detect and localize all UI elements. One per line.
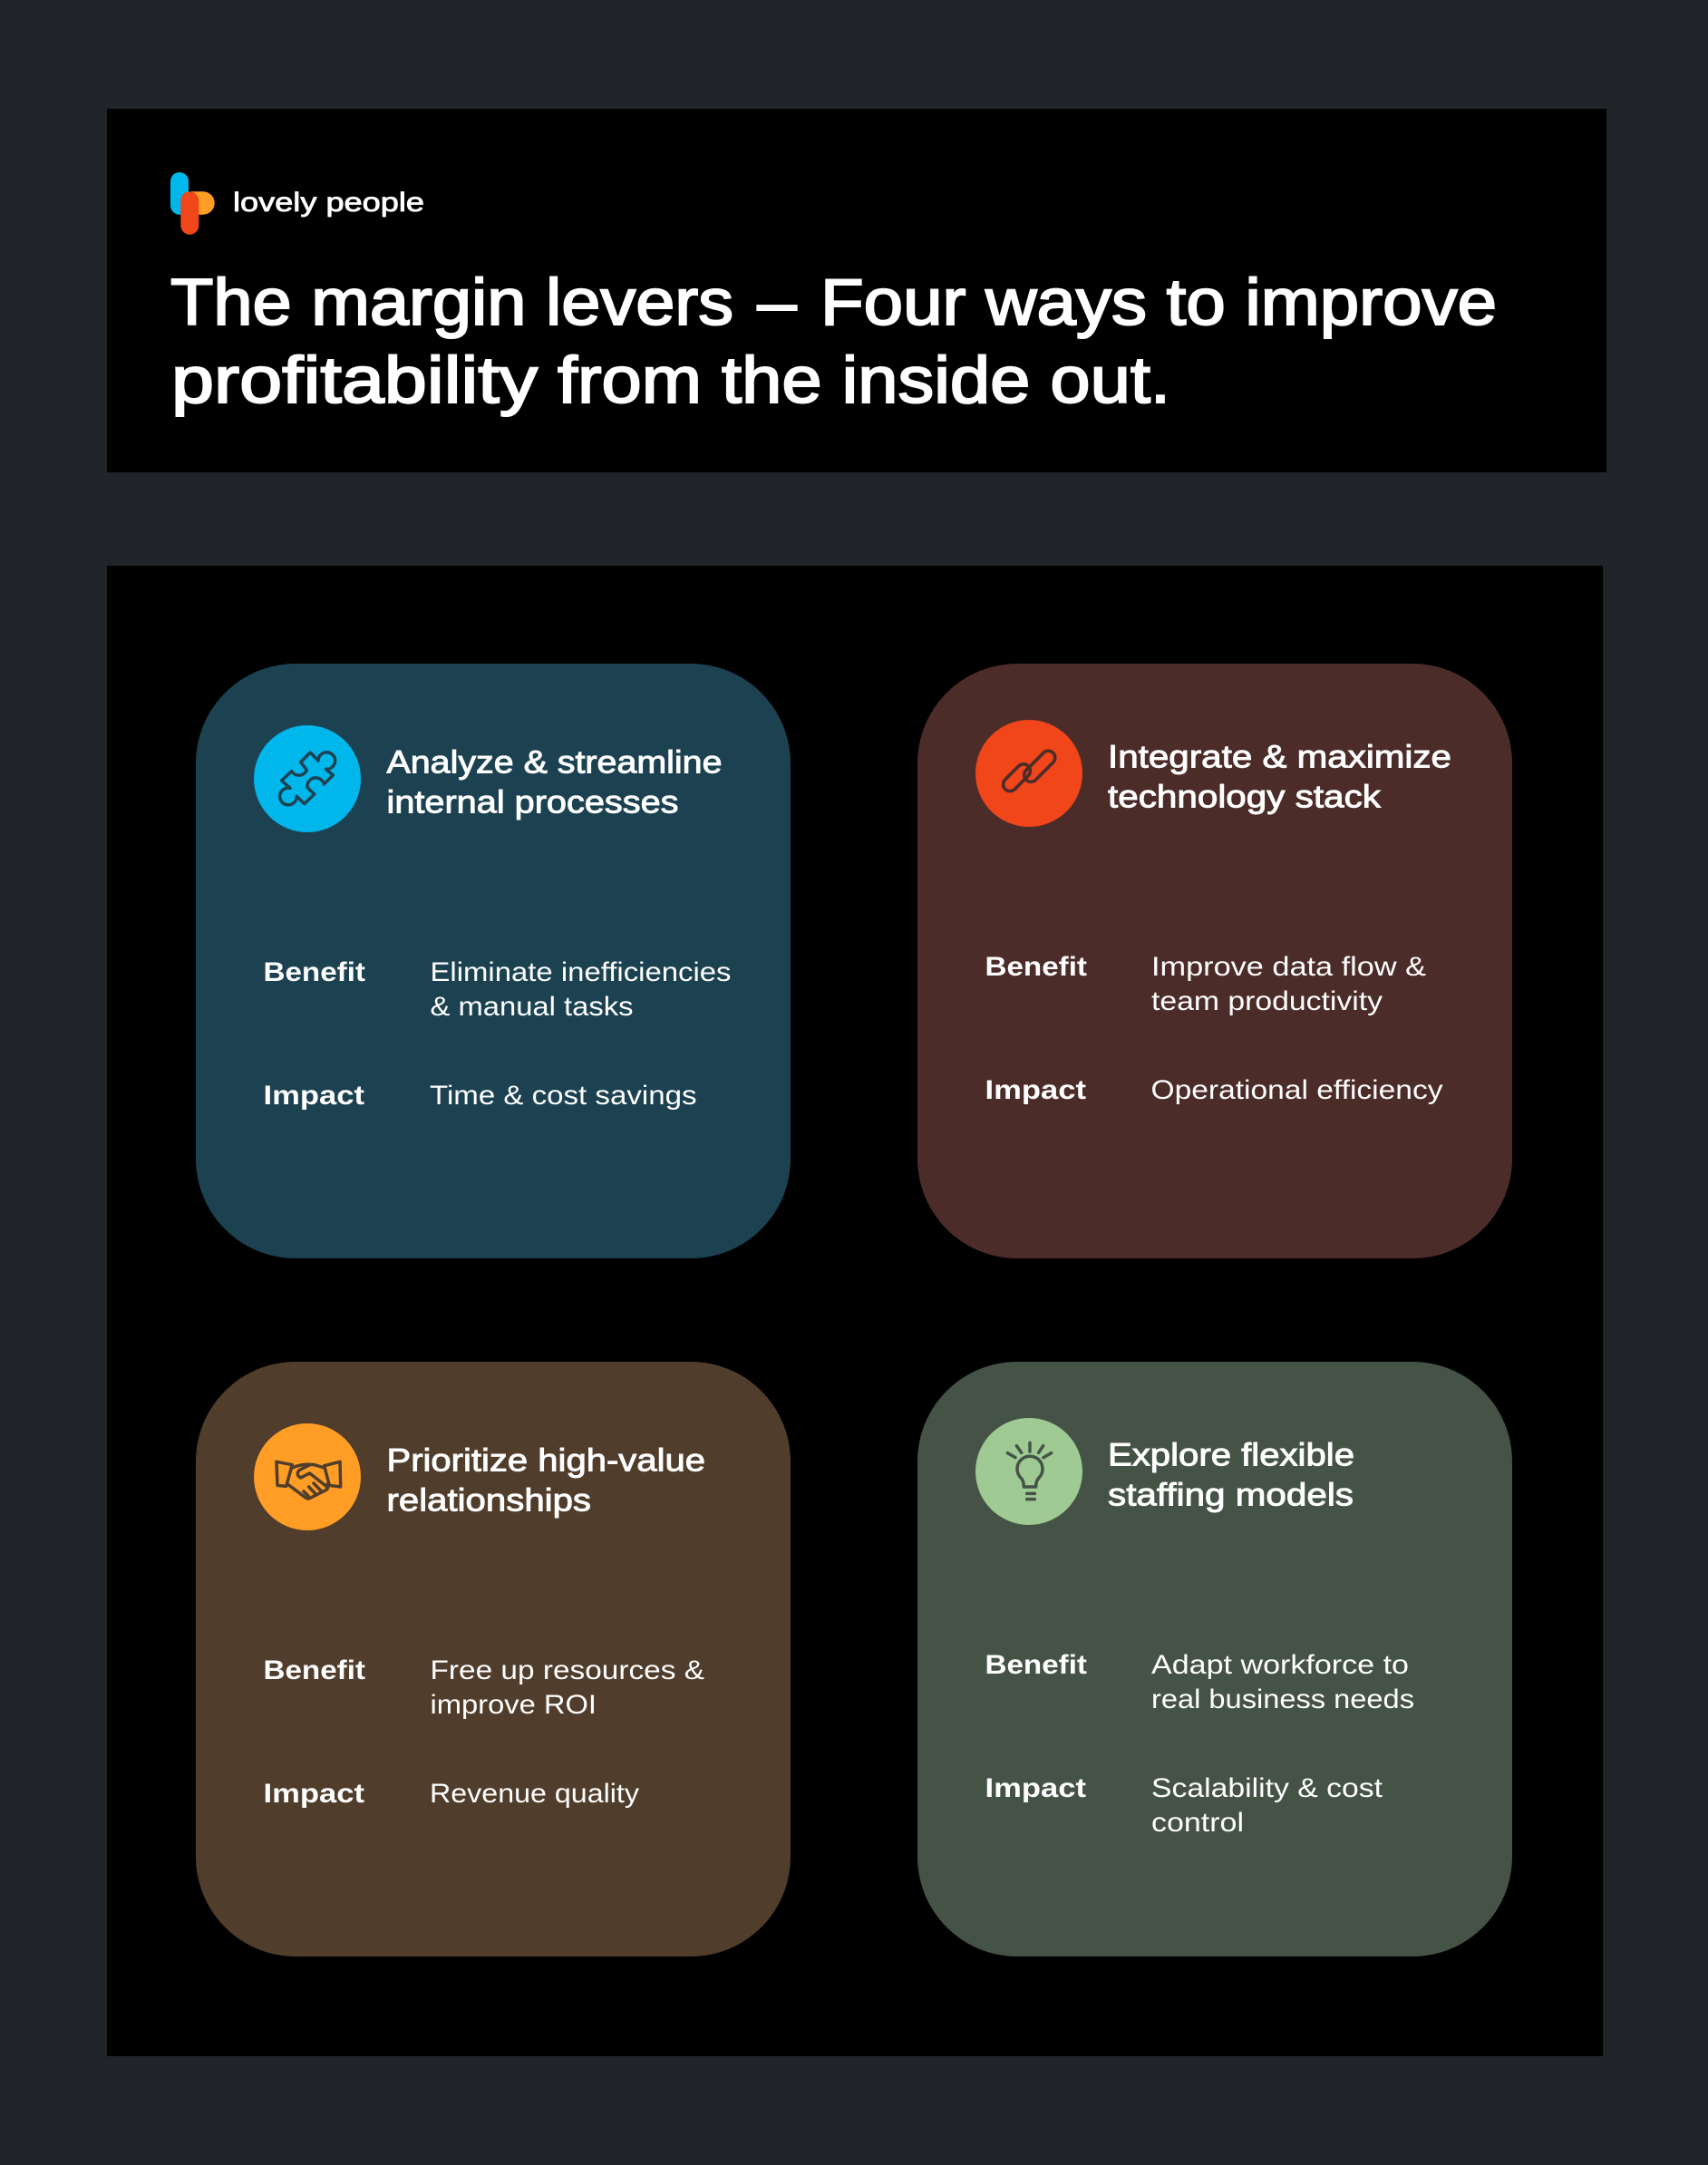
heading: Prioritize high-value [386, 1443, 705, 1478]
benefit row: Adapt workforce to [1151, 1650, 1409, 1680]
impact row: Time & cost savings [430, 1081, 696, 1111]
title: Four ways to improve [820, 267, 1497, 339]
impact row: Impact [985, 1075, 1086, 1105]
title: profitability [171, 345, 538, 417]
heading: Explore flexible [1108, 1438, 1354, 1472]
logo [170, 172, 424, 235]
panel: main [107, 566, 1603, 2056]
heading: internal processes [386, 785, 678, 820]
title: The margin levers [170, 267, 733, 339]
panel: header [107, 109, 1606, 472]
benefit row: Benefit [263, 957, 365, 987]
heading [386, 745, 722, 820]
benefit row: real business needs [1151, 1684, 1414, 1714]
icon: lightbulb [975, 1418, 1082, 1525]
logo wordmark: lovely people [233, 188, 424, 218]
icon: puzzle piece [254, 725, 361, 832]
heading [1108, 740, 1451, 814]
title [170, 267, 1497, 417]
icon: chain link [975, 720, 1082, 827]
benefit row: Eliminate inefficiencies [430, 957, 731, 987]
heading: Analyze & streamline [386, 745, 722, 780]
card: integrate and maximize [917, 664, 1512, 1258]
benefit row [985, 952, 1426, 1016]
benefit row: Free up resources & [430, 1655, 704, 1685]
heading [386, 1443, 705, 1518]
benefit row: Benefit [985, 1650, 1087, 1680]
logo mark [170, 172, 215, 235]
impact row: Impact [263, 1779, 364, 1809]
heading: staffing models [1108, 1478, 1354, 1512]
benefit row [985, 1650, 1414, 1714]
benefit row: & manual tasks [430, 992, 633, 1022]
benefit row [263, 1655, 704, 1720]
heading: technology stack [1108, 780, 1382, 814]
heading: Integrate & maximize [1108, 740, 1451, 774]
benefit row: Benefit [263, 1655, 365, 1685]
impact row: control [1151, 1808, 1244, 1838]
impact row [263, 1779, 639, 1809]
impact row: Revenue quality [430, 1779, 639, 1809]
benefit row: improve ROI [430, 1690, 597, 1720]
card: flexible staffing [917, 1362, 1512, 1956]
impact row: Operational efficiency [1151, 1075, 1443, 1105]
icon: handshake [254, 1423, 361, 1530]
heading: relationships [386, 1483, 591, 1518]
impact row [263, 1081, 696, 1111]
card: prioritize relationships [196, 1362, 791, 1956]
heading [1108, 1438, 1354, 1512]
benefit row: Improve data flow & [1151, 952, 1426, 982]
card: analyze and streamline [196, 664, 791, 1258]
title: — [757, 267, 797, 339]
impact row: Impact [263, 1081, 364, 1111]
benefit row: Benefit [985, 952, 1087, 982]
impact row [985, 1773, 1383, 1838]
benefit row: team productivity [1151, 986, 1383, 1016]
impact row: Impact [985, 1773, 1086, 1803]
title: from the inside out. [558, 345, 1170, 417]
impact row: Scalability & cost [1151, 1773, 1383, 1803]
benefit row [263, 957, 731, 1022]
impact row [985, 1075, 1443, 1105]
